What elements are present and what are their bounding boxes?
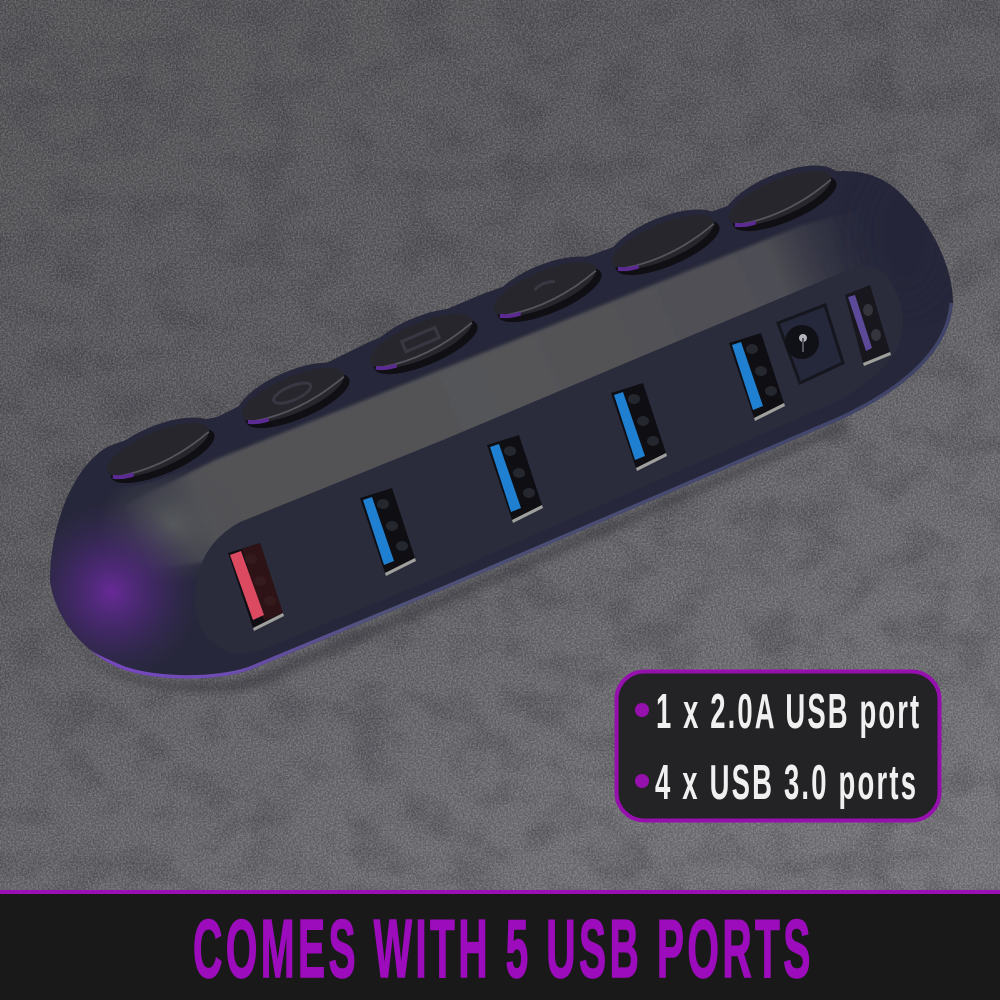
inset port panel [195,266,903,654]
purple-lit USB port [845,285,891,366]
button 3 [354,294,490,391]
button 5 [596,195,732,292]
bottom rim [66,303,953,679]
blue USB 3.0 port 1 [360,488,416,576]
blue USB 3.0 port 3 [611,383,667,471]
button 2 [226,348,362,445]
text: 1 x 2.0A USB port: 1 x 2.0A USB port [656,685,919,739]
red USB 2.0A port [228,543,284,631]
button 1 [91,403,227,500]
bullet 1 [635,703,649,717]
right end shade [892,186,940,249]
control buttons [91,151,849,500]
grey highlight on left end [116,478,202,569]
purple glow [50,516,189,668]
lit top band [145,220,846,564]
button 4 [478,242,614,339]
bottom banner [0,890,1000,1000]
blue USB 3.0 port 2 [487,435,543,523]
title: COMES WITH 5 USB PORTS [193,902,810,995]
callout panel: port list [616,672,940,820]
USB hub device [20,151,953,693]
bullet 2 [635,774,649,788]
power jack [778,305,843,383]
text: 4 x USB 3.0 ports: 4 x USB 3.0 ports [655,756,916,810]
button 6 [713,151,849,248]
hub shadow [70,420,850,693]
hub body [50,171,953,679]
blue USB 3.0 port 4 [729,333,785,421]
